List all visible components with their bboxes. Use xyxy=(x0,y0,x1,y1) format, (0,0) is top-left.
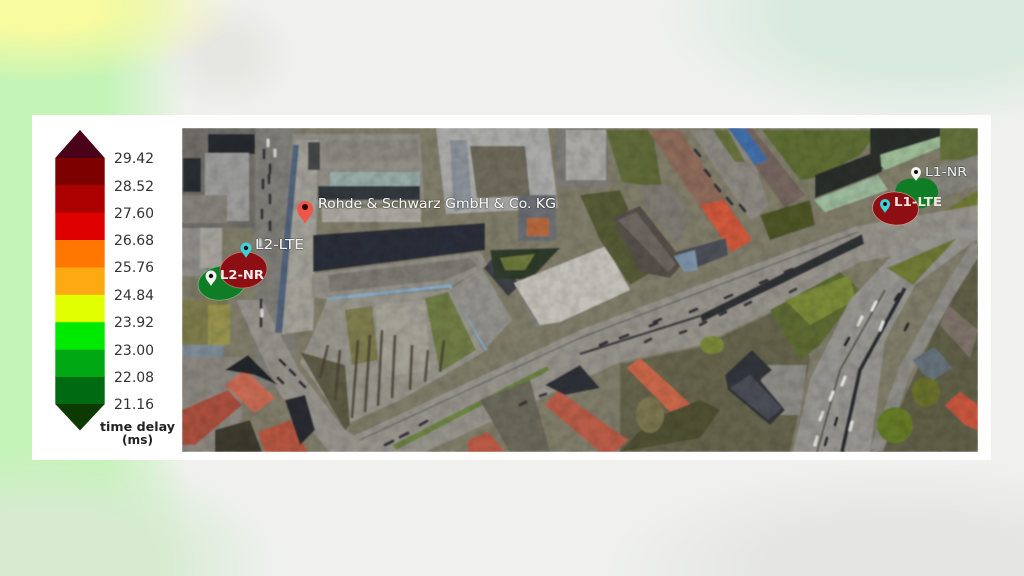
tick labels xyxy=(114,151,154,413)
vegetation band xyxy=(606,130,662,188)
left block xyxy=(182,128,257,228)
parked cars xyxy=(260,140,908,445)
tick labels: 23.92 xyxy=(114,315,154,331)
tick labels: 24.84 xyxy=(114,288,154,304)
location cell: L2-NR xyxy=(198,252,268,300)
colour bar xyxy=(55,130,105,430)
aerial map xyxy=(182,128,978,452)
rows of houses and parking xyxy=(690,130,768,222)
label: L1-NR: L1-NR xyxy=(925,164,967,179)
south-east vegetation and curved highway xyxy=(620,313,810,452)
red coverage ellipse xyxy=(871,190,920,227)
main building complex xyxy=(280,134,424,335)
courtyard xyxy=(300,289,484,425)
tick labels: 26.68 xyxy=(114,233,154,249)
tick labels: 27.60 xyxy=(114,206,154,222)
legend title xyxy=(100,420,175,447)
legend title: (ms) xyxy=(122,433,153,447)
location cell: L1-NR xyxy=(895,164,967,209)
location cell: L1-LTE xyxy=(871,190,942,227)
aerial photo ground, roads and buildings xyxy=(182,128,978,452)
label: L1-LTE: L1-LTE xyxy=(894,194,942,209)
white figure panel xyxy=(32,115,991,460)
icon: white pin xyxy=(206,270,216,286)
green coverage ellipse xyxy=(895,178,938,209)
tick labels: 29.42 xyxy=(114,151,154,167)
west houses xyxy=(182,390,242,445)
icon: white pin xyxy=(911,167,921,181)
icon: cyan pin xyxy=(880,199,890,213)
tick labels: 22.08 xyxy=(114,370,154,386)
aerial photo texture xyxy=(182,128,978,452)
label: L2-NR: L2-NR xyxy=(220,267,264,282)
tick labels: 28.52 xyxy=(114,179,154,195)
main diagonal road xyxy=(345,205,978,452)
headquarters marker xyxy=(297,197,556,224)
legend title: time delay xyxy=(100,420,175,434)
label: Rohde & Schwarz: Rohde & Schwarz GmbH & Co. KG xyxy=(318,197,556,212)
tick labels: 23.00 xyxy=(114,343,154,359)
south houses xyxy=(725,350,785,425)
tick labels: 21.16 xyxy=(114,397,154,413)
colour scale legend xyxy=(55,130,175,447)
parking deck xyxy=(514,246,630,326)
icon: cyan pin xyxy=(240,243,252,258)
label: L2-LTE: L2-LTE xyxy=(255,238,304,253)
tick labels: 25.76 xyxy=(114,260,154,276)
icon: red pin xyxy=(297,201,313,224)
green coverage ellipse xyxy=(198,266,244,300)
location cell: L2-LTE xyxy=(240,238,304,258)
red coverage ellipse xyxy=(220,252,268,288)
top courtyard building xyxy=(436,128,558,214)
